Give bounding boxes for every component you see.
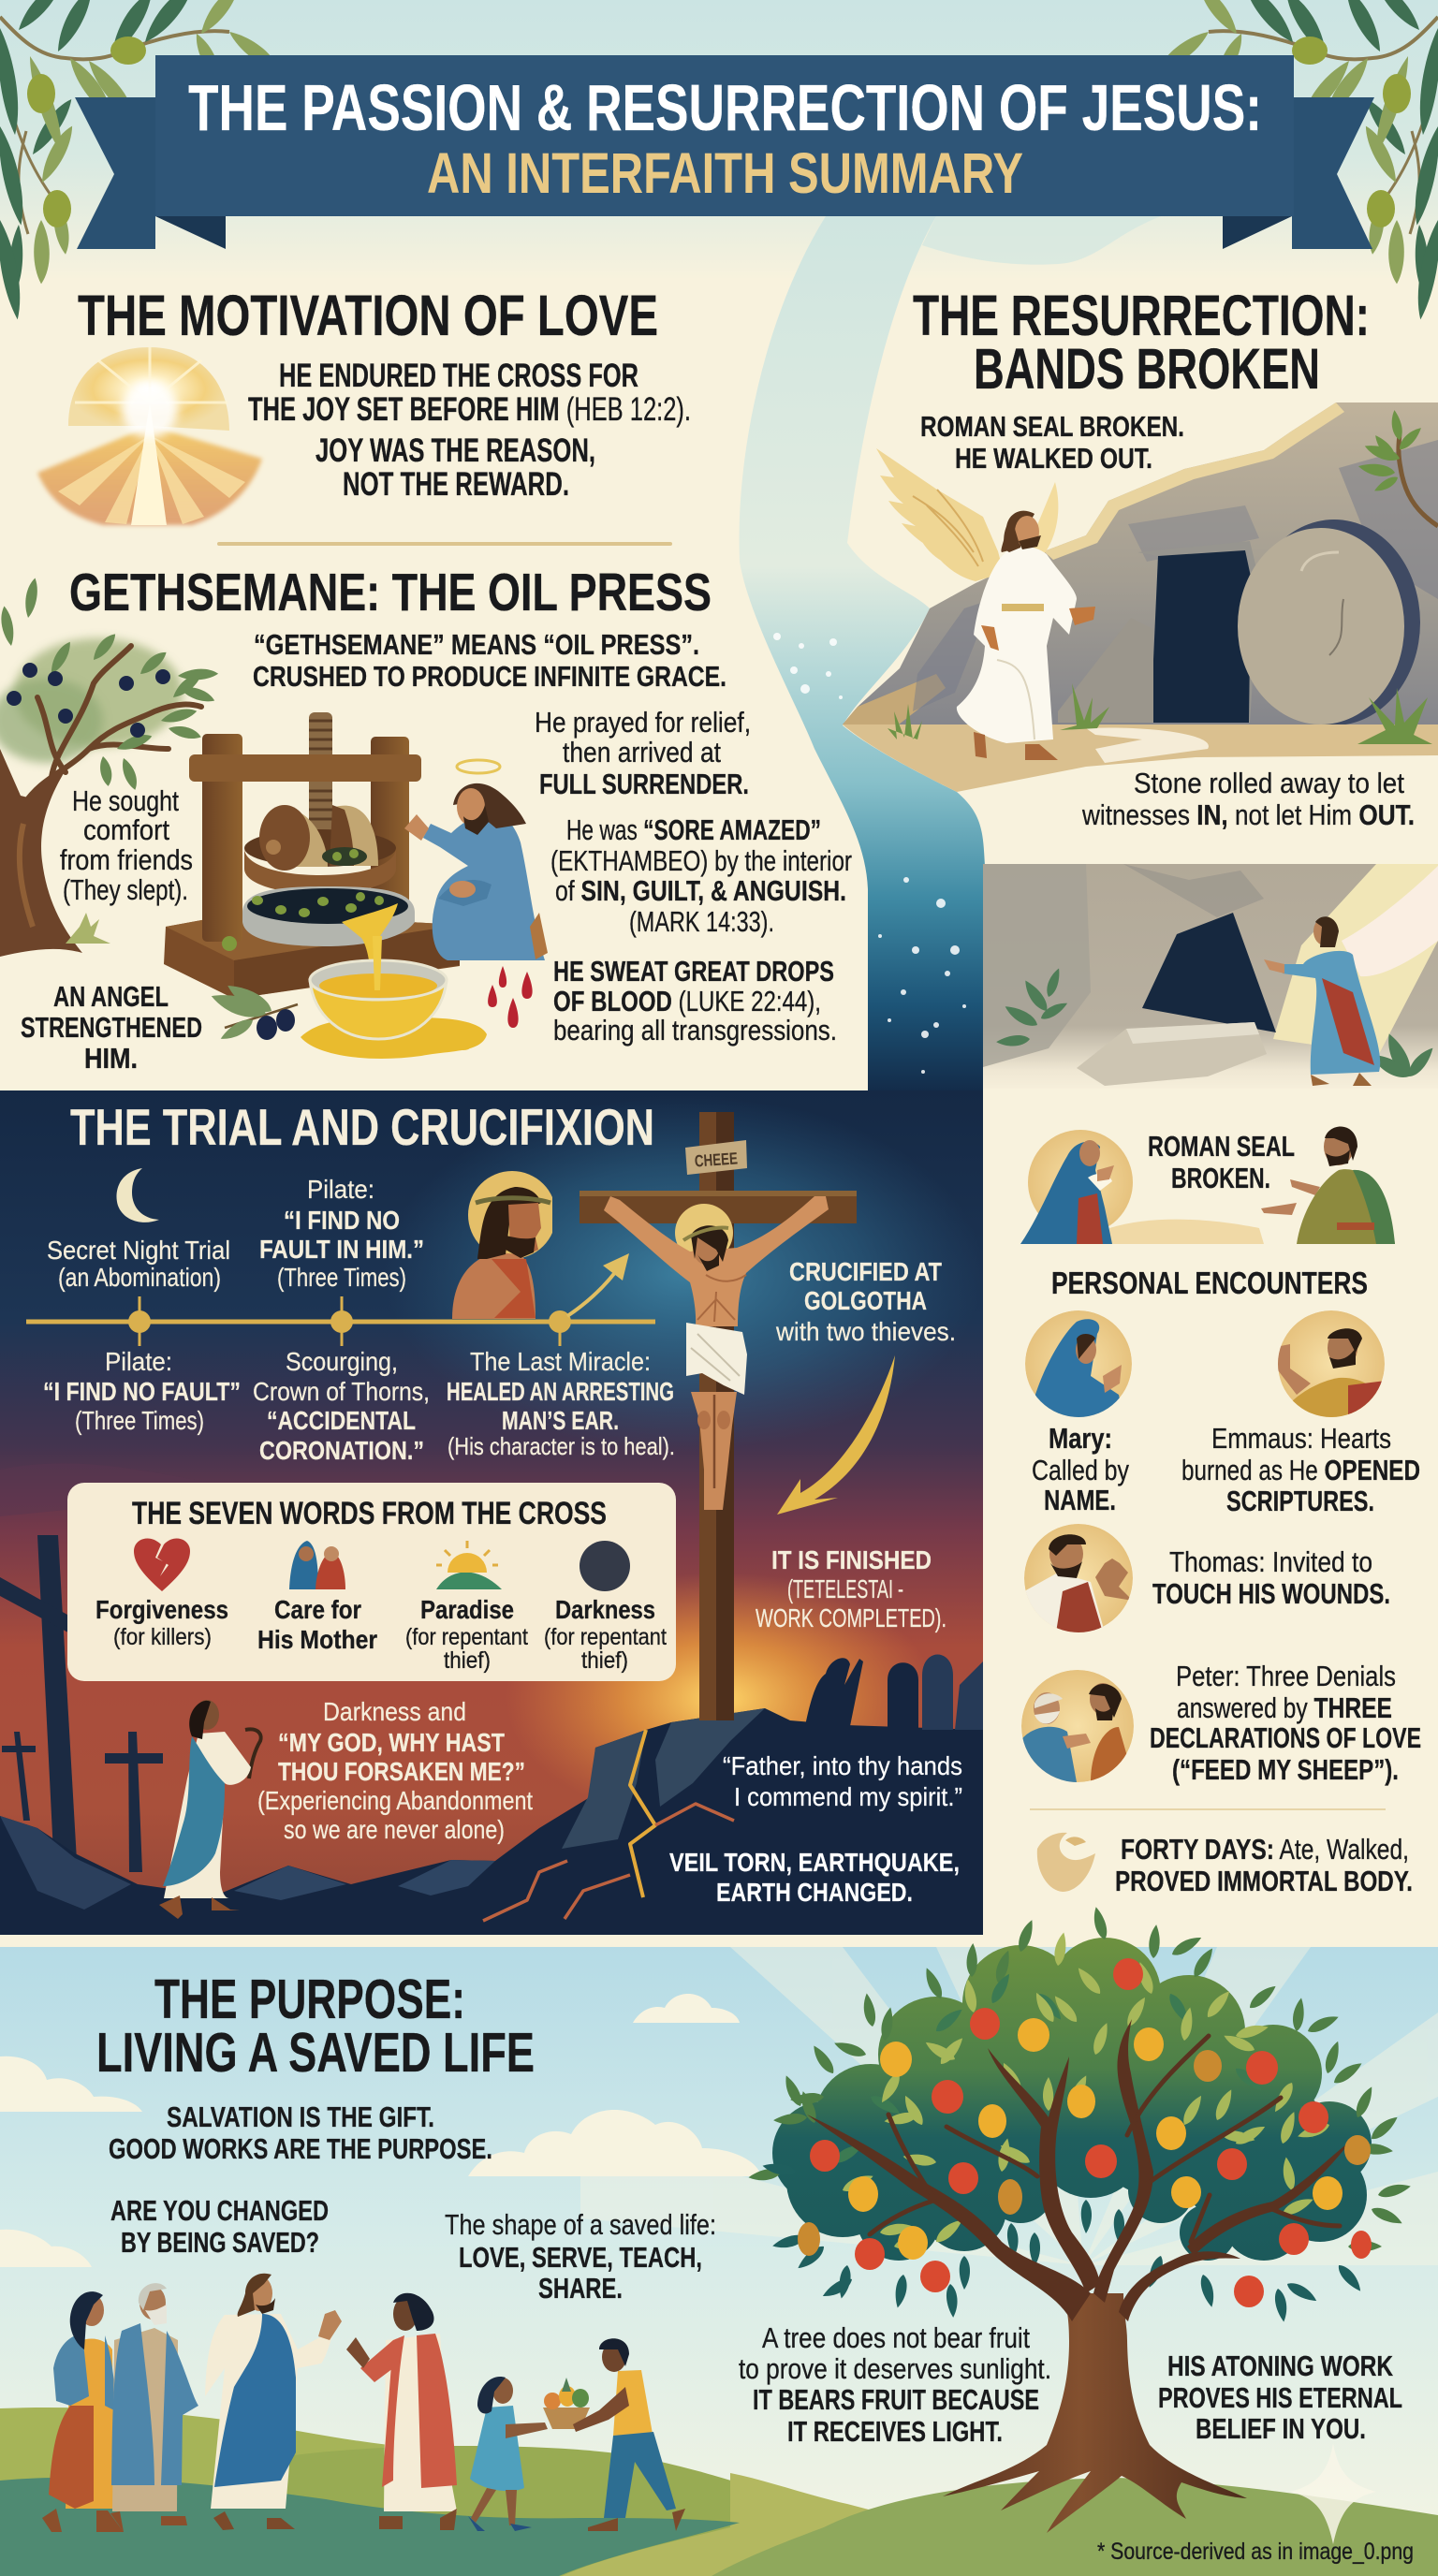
heading: the purpose: THE PURPOSE: (154, 1969, 465, 2030)
illustration: witnesses at tomb (1020, 1126, 1395, 1244)
river stream (740, 216, 1161, 1090)
heading: seven words: THE SEVEN WORDS FROM THE CROSS (132, 1496, 607, 1531)
panel: the resurrection bands broken (843, 284, 1438, 831)
panel: second tomb scene (983, 864, 1438, 1089)
canopy (772, 1938, 1372, 2261)
text: darkness and forsaken: “MY GOD, WHY HAST (278, 1728, 505, 1757)
text: tree does not bear fruit: A tree does not bear fruit (762, 2321, 1030, 2354)
grass tufts (888, 683, 1432, 744)
text: stone rolled away (1081, 767, 1415, 831)
inner dark leaves (830, 1971, 1318, 2167)
text: sought comfort: comfort (83, 813, 169, 846)
hills (0, 2408, 1438, 2576)
text: drops of blood (553, 955, 837, 1046)
text: sought comfort (60, 784, 193, 906)
silhouettes of crosses (0, 1535, 163, 1910)
text: secret night trial: (an Abomination) (58, 1263, 221, 1292)
portrait: mary (1025, 1310, 1132, 1418)
text: tree does not bear fruit: to prove it deserves sunlight. (739, 2352, 1051, 2385)
text: mary: NAME. (1044, 1484, 1116, 1516)
text: scourging (253, 1347, 430, 1465)
heading: gethsemane: GETHSEMANE: THE OIL PRESS (69, 563, 712, 622)
outer leaves (748, 1906, 1412, 2251)
text: prayed for relief: FULL SURRENDER. (539, 768, 749, 800)
text: last miracle: The Last Miracle: (470, 1347, 651, 1376)
portrait: jesus with crown of thorns (452, 1171, 556, 1319)
text: secret night trial (47, 1236, 230, 1292)
text: veil torn: VEIL TORN, EARTHQUAKE, (669, 1848, 960, 1877)
earth cracks (483, 1730, 734, 1921)
icon: broken heart (134, 1539, 190, 1591)
text: are you changed: BY BEING SAVED? (121, 2226, 319, 2259)
text: pilate bottom (43, 1347, 241, 1435)
text: mary: Mary: (1049, 1422, 1112, 1455)
text: prayed for relief (535, 706, 751, 800)
text: shape of a saved life (445, 2208, 716, 2305)
text: tree does not bear fruit: IT RECEIVES LIGHT. (787, 2415, 1003, 2448)
panel: the motivation of love (37, 284, 691, 525)
timeline (26, 1296, 655, 1346)
top sky (0, 0, 1438, 281)
text: last miracle: MAN’S EAR. (502, 1406, 619, 1435)
illustration: praying jesus (404, 760, 548, 960)
text: mary (1032, 1422, 1129, 1516)
words (95, 1595, 667, 1674)
text: sore amazed (550, 813, 852, 938)
title banner (75, 55, 1374, 249)
text: scourging: CORONATION.” (259, 1436, 424, 1465)
text: father into thy hands: “Father, into thy hands (723, 1751, 962, 1780)
text: emmaus: Emmaus: Hearts (1211, 1422, 1391, 1455)
icon: blood drops (488, 966, 533, 1028)
heading: personal encounters: PERSONAL ENCOUNTERS (1051, 1266, 1368, 1300)
text: veil torn: EARTH CHANGED. (716, 1878, 913, 1907)
text: secret night trial: Secret Night Trial (47, 1236, 230, 1265)
text: salvation gift: SALVATION IS THE GIFT. (167, 2100, 434, 2133)
icon: sun and hills (436, 1541, 502, 1589)
text: shape of a saved life: SHARE. (538, 2272, 623, 2305)
illustration: olive tree (0, 577, 218, 957)
text: peter: Peter: Three Denials (1176, 1660, 1396, 1692)
text: thomas (1152, 1545, 1390, 1610)
text: sought comfort: (They slept). (63, 873, 188, 906)
icon: sunburst (37, 347, 262, 525)
text: veil torn (669, 1848, 960, 1907)
figure: jesus looking up with staff (159, 1700, 261, 1919)
words: Care for (274, 1595, 361, 1624)
words: (for repentant (405, 1624, 528, 1650)
girl in blue dress (468, 2377, 548, 2531)
inner leaves (840, 1932, 1331, 2251)
sun rays (580, 1947, 1438, 2265)
words: Forgiveness (95, 1595, 228, 1624)
panel: gethsemane the oil press (0, 563, 852, 1075)
text: atoning work: BELIEF IN YOU. (1196, 2412, 1366, 2445)
text: last miracle: HEALED AN ARRESTING (447, 1377, 674, 1406)
text: sore amazed: of SIN, GUILT, & ANGUISH. (555, 874, 846, 907)
heading: the resurrection (913, 284, 1370, 401)
risen jesus figure (957, 511, 1095, 760)
text: salvation gift: GOOD WORKS ARE THE PURPOSE. (109, 2132, 492, 2165)
text: drops of blood: bearing all transgressions. (553, 1014, 837, 1046)
text: scourging: Crown of Thorns, (253, 1377, 430, 1406)
woman in orange (42, 2291, 124, 2532)
text: pilate bottom: “I FIND NO FAULT” (43, 1377, 241, 1406)
panel: the trial and crucifixion (0, 1090, 983, 1935)
text: crucified at golgotha: GOLGOTHA (804, 1286, 927, 1315)
text: joy set before him: THE JOY SET BEFORE HIM (HEB 12:2). (248, 391, 691, 428)
text: pilate top: (Three Times) (277, 1263, 406, 1292)
text: stone rolled away: Stone rolled away to let (1134, 767, 1404, 799)
portrait: peter (1020, 1670, 1135, 1782)
text: forty days (1115, 1833, 1413, 1897)
text: tree does not bear fruit (739, 2321, 1051, 2448)
text: peter (1150, 1660, 1421, 1786)
text: crucified at golgotha: CRUCIFIED AT (789, 1257, 942, 1286)
text: prayed for relief: then arrived at (563, 736, 721, 768)
olive branch on rock (1357, 409, 1438, 526)
text: joy set before him: HE ENDURED THE CROSS FOR (279, 358, 638, 394)
text: atoning work (1158, 2349, 1402, 2445)
text: drops of blood: OF BLOOD (LUKE 22:44), (553, 985, 821, 1017)
fruits (810, 1958, 1372, 2307)
icon: bread (1037, 1833, 1095, 1892)
heading: motivation of love: THE MOTIVATION OF LOVE (78, 284, 658, 347)
woman in red (346, 2293, 457, 2530)
jesus in white and blue (205, 2274, 342, 2530)
arrow: swoosh to it is finished (777, 1355, 895, 1515)
text: scourging: “ACCIDENTAL (267, 1406, 416, 1435)
illustration: fruit tree (748, 1906, 1412, 2533)
illustration: oil bowl (301, 936, 487, 1059)
text: darkness and forsaken: Darkness and (323, 1697, 466, 1726)
text: crucified at golgotha: with two thieves. (775, 1317, 956, 1346)
text: roman seal broken 2: ROMAN SEAL (1148, 1130, 1295, 1163)
words: (for killers) (113, 1624, 212, 1650)
elder in blue (110, 2283, 198, 2532)
words: thief) (581, 1647, 628, 1674)
background hills (0, 1708, 983, 1935)
illustration: people walking (42, 2274, 685, 2532)
text: emmaus (1181, 1422, 1420, 1517)
text: pilate top: “I FIND NO (284, 1206, 400, 1235)
words: Paradise (420, 1595, 514, 1624)
clouds (0, 1994, 761, 2267)
trunk and branches (807, 2019, 1353, 2533)
text: pilate bottom: Pilate: (105, 1347, 172, 1376)
illustration: oil press (164, 712, 460, 999)
figure kneeling and tombstones (805, 1655, 983, 1730)
text: scourging: Scourging, (286, 1347, 398, 1376)
text: angel strengthened: AN ANGEL (53, 980, 169, 1013)
heading: the purpose: LIVING A SAVED LIFE (96, 2022, 535, 2084)
text: emmaus: SCRIPTURES. (1226, 1485, 1374, 1517)
illustration: crucifix (580, 1112, 857, 1720)
illustration: olive sprig (209, 979, 298, 1045)
text: sought comfort: He sought (72, 784, 179, 817)
text: joy set before him: NOT THE REWARD. (343, 466, 569, 503)
text: drops of blood: HE SWEAT GREAT DROPS (553, 955, 834, 988)
words: His Mother (257, 1625, 377, 1654)
plants (996, 967, 1437, 1083)
text: darkness and forsaken: THOU FORSAKEN ME?” (278, 1757, 525, 1786)
olive branch top right (1153, 0, 1438, 321)
portrait: emmaus (1278, 1310, 1385, 1417)
basket of fruit (543, 2378, 590, 2429)
text: sought comfort: from friends (60, 843, 193, 876)
text: stone rolled away: witnesses IN, not let Him OUT. (1081, 798, 1415, 831)
text: angel strengthened: STRENGTHENED (21, 1011, 202, 1044)
text: it is finished (756, 1545, 946, 1632)
text: pilate top: Pilate: (307, 1175, 374, 1204)
text: darkness and forsaken: (Experiencing Abandonment (257, 1786, 533, 1815)
icon: crescent moon (116, 1168, 159, 1222)
angel figure (1264, 866, 1438, 1086)
panel: seven words from the cross (67, 1483, 676, 1681)
panel: the purpose living a saved life (0, 1906, 1438, 2576)
text: crucified at golgotha (775, 1257, 956, 1346)
text: roman seal broken 2 (1148, 1130, 1295, 1194)
text: gethsemane meaning (253, 628, 726, 693)
text: roman seal broken 2: BROKEN. (1171, 1162, 1270, 1194)
heading: the resurrection: BANDS BROKEN (974, 337, 1320, 401)
text: forty days: FORTY DAYS: Ate, Walked, (1121, 1833, 1409, 1866)
text: tree does not bear fruit: IT BEARS FRUIT BECAUSE (753, 2383, 1039, 2416)
sign on the cross (685, 1140, 747, 1175)
text: gethsemane meaning: CRUSHED TO PRODUCE INFINITE GRACE. (253, 660, 726, 693)
text: shape of a saved life: The shape of a saved life: (445, 2208, 716, 2241)
text: shape of a saved life: LOVE, SERVE, TEACH, (459, 2241, 702, 2274)
portrait: thomas (1024, 1524, 1133, 1632)
olive branch top left (0, 0, 285, 321)
text: father into thy hands: I commend my spirit.” (734, 1782, 962, 1811)
body on the cross (604, 1196, 829, 1510)
text: pilate top: FAULT IN HIM.” (259, 1235, 424, 1264)
arrow to the cross (567, 1253, 629, 1316)
text: sore amazed: (MARK 14:33). (629, 905, 774, 938)
text: angel strengthened (21, 980, 202, 1075)
text: pilate bottom: (Three Times) (75, 1406, 204, 1435)
panel: personal encounters (1020, 1126, 1421, 1897)
words: thief) (444, 1647, 491, 1674)
text: roman seal broken: ROMAN SEAL BROKEN. (920, 410, 1184, 443)
title line 2: AN INTERFAITH SUMMARY (427, 141, 1023, 205)
text: pilate top (259, 1175, 424, 1292)
heading: the purpose (96, 1969, 535, 2084)
illustration: tomb with rolled stone (843, 402, 1438, 792)
text: sore amazed: (EKTHAMBEO) by the interior (550, 844, 852, 877)
text: sore amazed: He was “SORE AMAZED” (566, 813, 821, 846)
text: it is finished: IT IS FINISHED (771, 1545, 932, 1574)
text: angel strengthened: HIM. (84, 1042, 138, 1075)
text: joy set before him (248, 358, 691, 503)
icon: darkened sun (580, 1541, 630, 1591)
text: are you changed (110, 2194, 329, 2259)
text: thomas: Thomas: Invited to (1169, 1545, 1372, 1578)
text: it is finished: WORK COMPLETED). (756, 1603, 946, 1632)
text: father into thy hands (723, 1751, 962, 1811)
text: are you changed: ARE YOU CHANGED (110, 2194, 329, 2227)
text: peter: answered by THREE (1177, 1691, 1392, 1724)
text: joy set before him: JOY WAS THE REASON, (315, 432, 595, 469)
text: mary: Called by (1032, 1454, 1129, 1486)
words: Darkness (555, 1595, 655, 1624)
angel wings (876, 448, 1058, 581)
text: darkness and forsaken: so we are never alone) (284, 1815, 505, 1844)
heading: trial and crucifixion: THE TRIAL AND CRUCIFIXION (70, 1098, 654, 1156)
text: salvation gift (109, 2100, 492, 2165)
text: gethsemane meaning: “GETHSEMANE” MEANS “OIL PRESS”. (254, 628, 699, 661)
text: prayed for relief: He prayed for relief, (535, 706, 751, 739)
text: roman seal broken: HE WALKED OUT. (955, 442, 1152, 475)
text: last miracle (447, 1347, 675, 1460)
boy in yellow (573, 2338, 685, 2531)
text: darkness and forsaken (257, 1697, 533, 1844)
icon: sparkle (1290, 2443, 1376, 2544)
text: it is finished: (TETELESTAI - (787, 1574, 903, 1603)
text: roman seal broken (920, 410, 1184, 475)
words: (for repentant (544, 1624, 667, 1650)
icon: mother and son (289, 1541, 345, 1589)
sign on the cross: CHEEE (694, 1149, 739, 1171)
text: last miracle: (His character is to heal). (448, 1432, 675, 1460)
